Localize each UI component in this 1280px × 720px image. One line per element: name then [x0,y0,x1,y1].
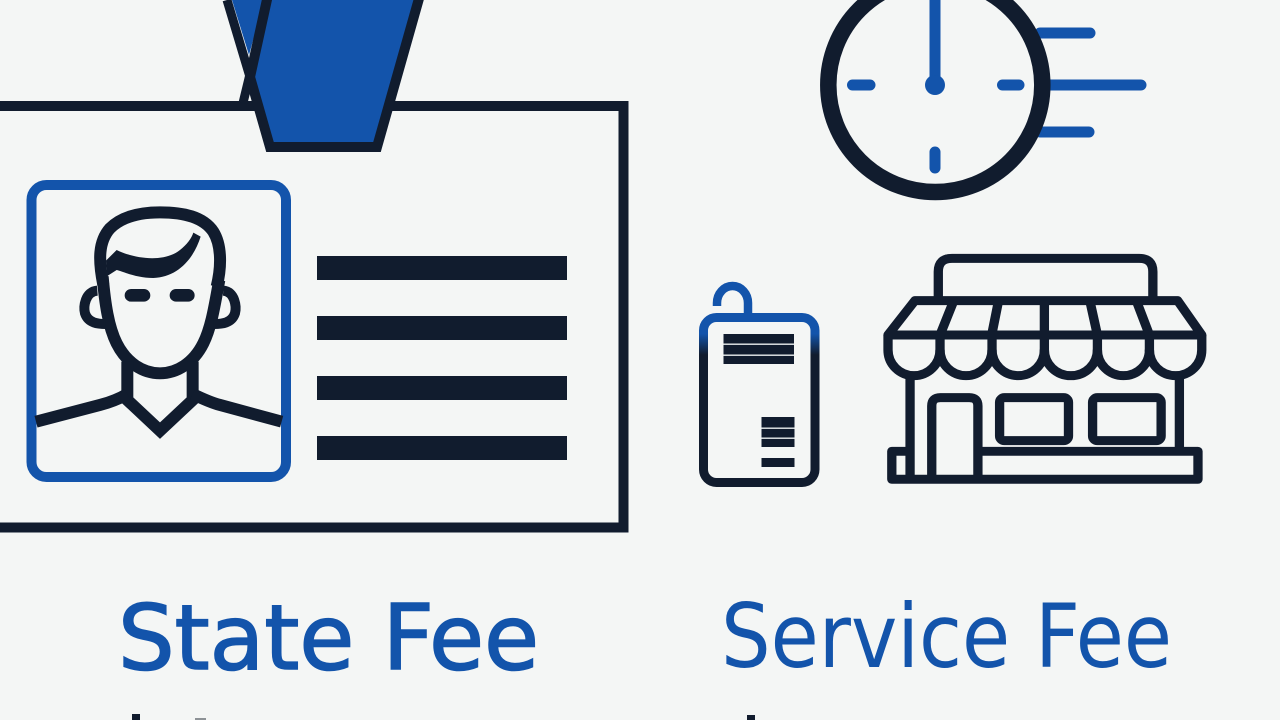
icon: storefront [888,258,1202,479]
icon: hanging tag [704,286,815,482]
heading: Service Fee: Service Fee [721,585,1172,688]
icon: person portrait [36,212,282,431]
badge text lines [317,256,567,460]
cropped text line under State Fee [132,714,206,720]
heading: State Fee: State Fee [118,586,539,691]
cropped text line under Service Fee [747,715,755,720]
lanyard strap [227,0,420,147]
badge card outline [0,106,624,528]
icon: ID badge [0,0,624,528]
portrait photo frame [32,185,286,477]
icon: fast clock [828,0,1141,192]
